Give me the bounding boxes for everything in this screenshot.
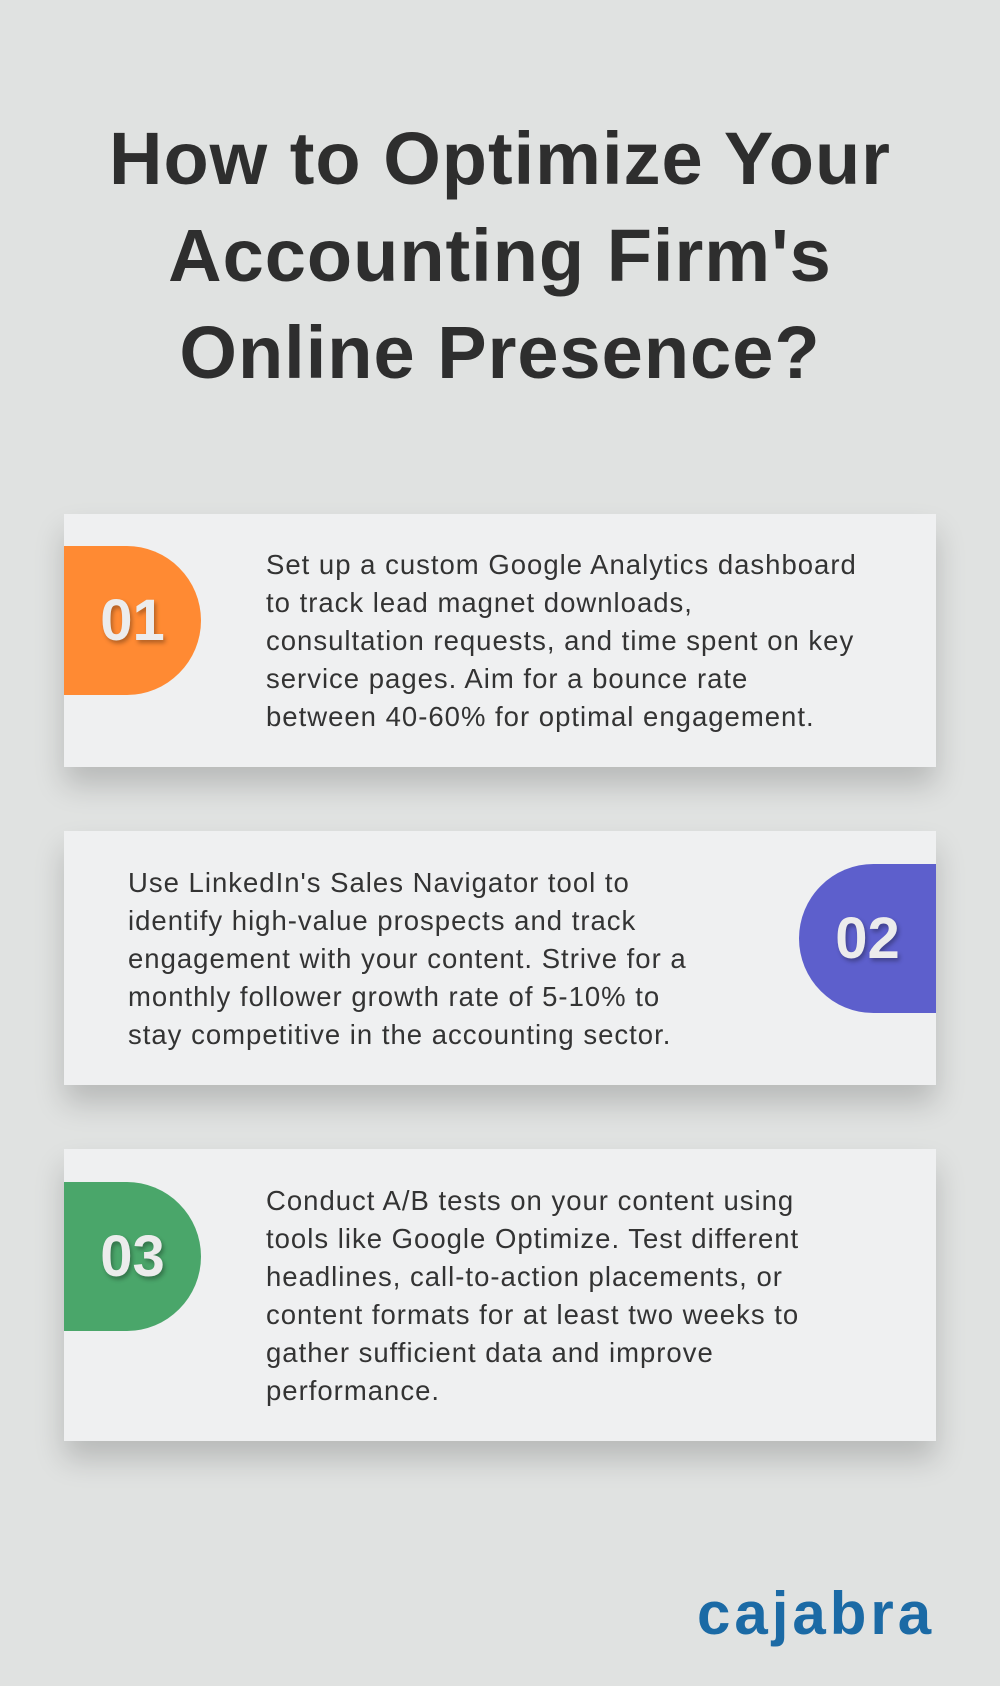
panel: step 3 (64, 1149, 936, 1441)
text: step 2: Use LinkedIn's Sales Navigator tool to (128, 867, 630, 898)
text: step 2: stay competitive in the accounting sector. (128, 1019, 671, 1050)
badge: 03 (64, 1182, 201, 1331)
text: step 2 (128, 867, 687, 1050)
text: step 3: headlines, call-to-action placements, or (266, 1261, 783, 1292)
text: step 3: performance. (266, 1375, 440, 1406)
badge: 02 (799, 864, 936, 1013)
text: step 2: monthly follower growth rate of 5-10% to (128, 981, 660, 1012)
text: step 1: consultation requests, and time spent on key (266, 625, 854, 656)
badge: 02: 02 (835, 906, 900, 971)
panel: step 2 (64, 831, 936, 1085)
text: step 2: engagement with your content. Strive for a (128, 943, 687, 974)
title (109, 117, 891, 394)
title: Online Presence? (179, 311, 821, 394)
text: step 1 (266, 549, 857, 732)
text: step 3: content formats for at least two weeks to (266, 1299, 799, 1330)
title: How to Optimize Your (109, 117, 891, 200)
text: step 1: Set up a custom Google Analytics dashboard (266, 549, 857, 580)
panel: step 1 (64, 514, 936, 767)
logo: cajabra: cajabra (697, 1580, 935, 1647)
text: step 3: gather sufficient data and improve (266, 1337, 714, 1368)
text: step 3: tools like Google Optimize. Test different (266, 1223, 799, 1254)
text: step 1: between 40-60% for optimal engagement. (266, 701, 815, 732)
title: Accounting Firm's (168, 214, 832, 297)
text: step 2: identify high-value prospects and track (128, 905, 636, 936)
text: step 1: service pages. Aim for a bounce rate (266, 663, 748, 694)
badge: 01 (64, 546, 201, 695)
text: step 3 (266, 1185, 799, 1406)
badge: 03: 03 (100, 1224, 165, 1289)
badge: 01: 01 (100, 588, 165, 653)
text: step 1: to track lead magnet downloads, (266, 587, 693, 618)
text: step 3: Conduct A/B tests on your content using (266, 1185, 794, 1216)
